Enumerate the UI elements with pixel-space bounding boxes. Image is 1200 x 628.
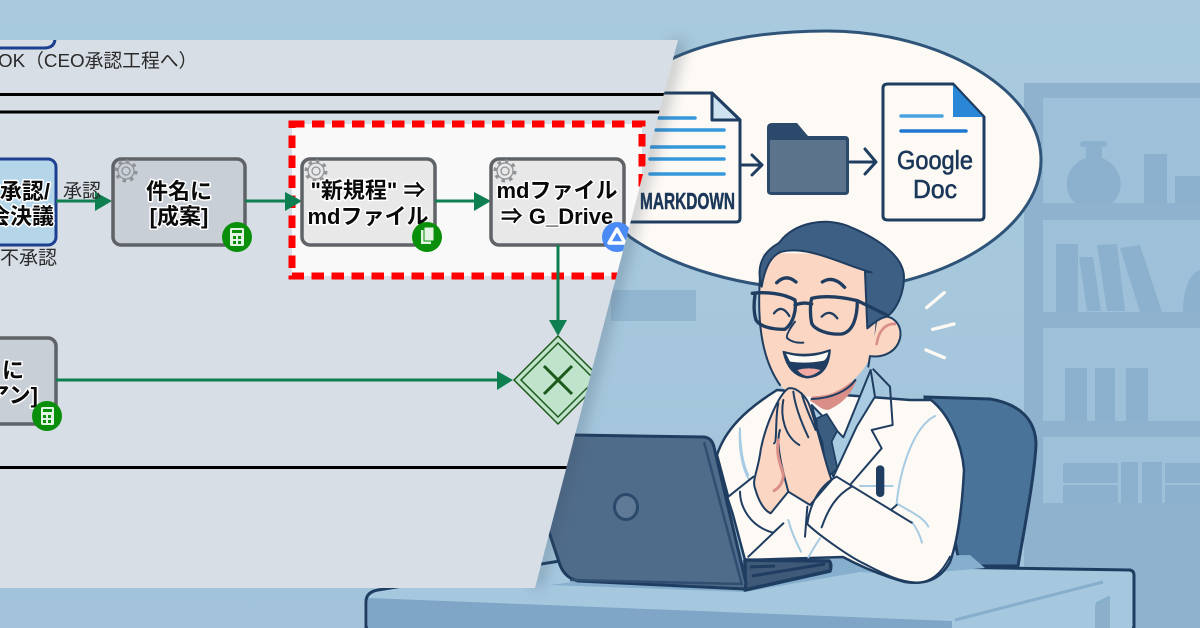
left sleeve [728,477,783,557]
laptop [545,435,831,590]
face [759,253,877,397]
icon: Google Doc document: Doc [913,174,957,204]
pen [876,465,884,497]
nose [787,322,803,343]
swimlane lines [0,94,680,468]
icon: gear [495,161,515,181]
icon: markdown document [625,93,740,222]
person [717,222,964,583]
node: 新規程 to md: mdファイル [307,204,429,229]
label: 承認: 承認 [63,181,101,202]
node: 件名に成案: [成案] [150,204,208,229]
arrow: approval to 成案 [56,192,112,211]
neck [810,380,857,410]
node: 件名に成案 [113,159,252,252]
node: approval [0,159,56,245]
panel shadow [530,40,686,588]
label: 不承認: 不承認 [0,248,57,269]
hands [754,388,832,513]
icon: calculator badge [222,222,252,252]
chair [925,397,1036,566]
icon: gear [116,161,136,181]
icon: calculator badge [32,401,62,431]
highlight: red dashed box [292,124,642,276]
body: lab coat [717,390,964,583]
background shelf: left fragment [611,290,696,321]
node: approval: 承認/ [0,179,50,204]
background bookshelf [1024,83,1200,628]
arrow: bottom node to gateway [56,371,513,390]
node: bottom left: に [2,358,24,383]
ear [870,316,901,356]
eyebrows [777,278,845,287]
node: 件名に成案: 件名に [146,179,212,204]
glasses [752,293,887,334]
icon: Google Drive badge [602,222,632,252]
shirt and tie [812,370,875,478]
node: bottom left [0,338,62,431]
arrow: markdown to folder [740,155,762,175]
node: md to G_Drive: ⇒ G_Drive [501,204,613,229]
lapel [850,369,893,485]
arrow: Drive to gateway [549,245,567,336]
arrow: 成案 to 新規程 [245,192,302,211]
icon: folder [767,123,849,195]
blue node fragment top [0,38,55,48]
arrow: folder to Google Doc [850,149,876,174]
node: 新規程 to md: "新規程" ⇒ [311,178,425,203]
sleeve outlines [805,477,950,583]
mouth [783,350,830,378]
gateway diamond [514,336,602,424]
label: MARKDOWN: MARKDOWN [640,188,735,214]
coat creases [740,416,935,503]
icon: gear [306,161,326,181]
node: 新規程 to md [302,159,442,252]
hair [760,222,904,328]
eyes [774,309,837,318]
branch label: OK: OK（CEO承認工程へ） [0,50,197,71]
icon: Google Doc document [883,84,984,220]
label: Google Doc: Google [897,145,973,175]
panel: workflow diagram [0,38,680,588]
right sleeve [807,477,923,567]
speech bubble [606,31,1041,290]
desk [366,555,1134,628]
node: md to G_Drive [491,159,632,252]
arrow: md to Drive [435,192,491,211]
sparkle marks [926,293,954,358]
laptop logo [614,494,638,520]
icon: document badge [412,222,442,252]
node: md to G_Drive: mdファイル [496,178,618,203]
